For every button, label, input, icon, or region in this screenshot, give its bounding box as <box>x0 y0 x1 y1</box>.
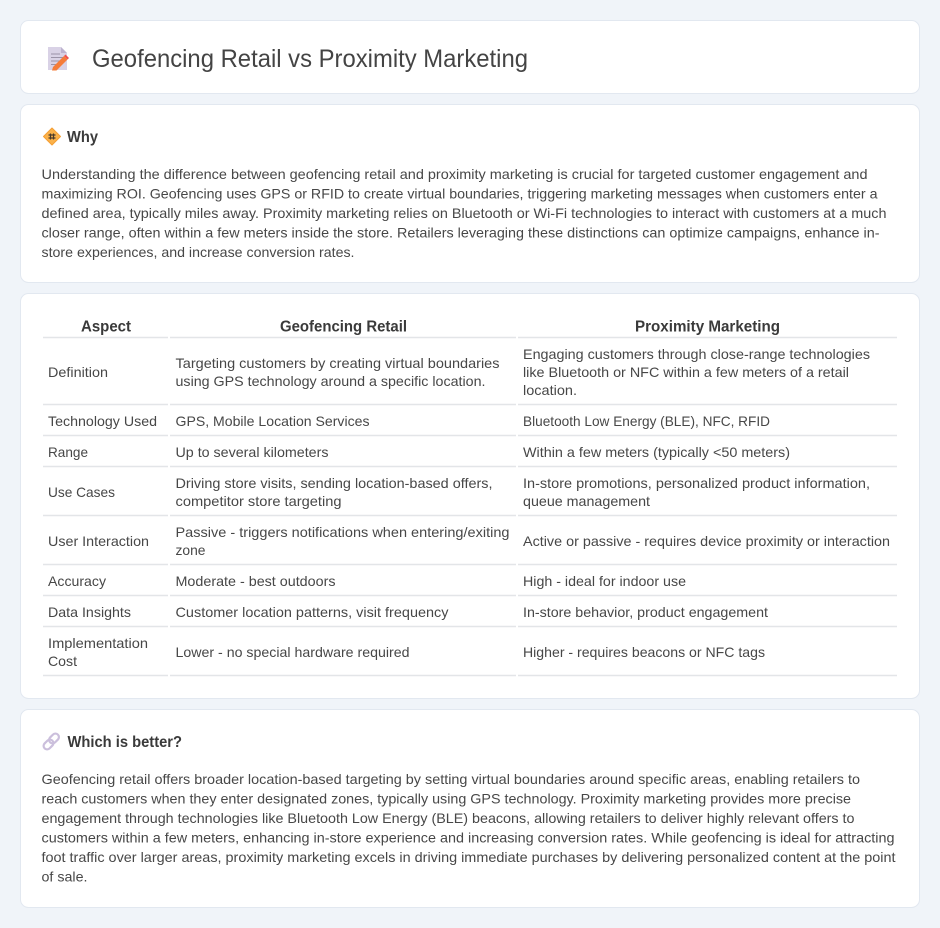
row: definition <box>48 346 870 398</box>
text block: why paragraph: defined area, typically miles away. Proximity marketing relies on Bluetooth or Wi-Fi technologies to interact with customers at a much <box>42 205 886 221</box>
table header row: Proximity Marketing <box>635 318 780 336</box>
panel: header <box>20 20 920 94</box>
row: use cases <box>48 475 870 509</box>
panel: comparison table <box>20 294 920 698</box>
row: use cases: Driving store visits, sending location-based offers, <box>176 475 492 491</box>
row: implementation cost <box>48 635 765 669</box>
table header row: Aspect <box>81 318 132 336</box>
table header row: Geofencing Retail <box>280 318 407 336</box>
icon: chain link <box>42 732 60 751</box>
panel: why <box>20 104 920 282</box>
row: data insights <box>48 604 768 620</box>
row: range: Range <box>48 444 88 460</box>
row: technology used: Technology Used <box>48 413 157 429</box>
row: range <box>48 444 790 460</box>
text block: why paragraph <box>42 166 886 260</box>
row: user interaction: zone <box>176 542 206 558</box>
row: technology used <box>48 413 770 429</box>
row: data insights: Data Insights <box>48 604 131 620</box>
heading: which is better: Which is better? <box>68 734 182 751</box>
text block: why paragraph: maximizing ROI. Geofencing uses GPS or RFID to create virtual boundaries, triggering marketing messages when customers enter a <box>42 186 878 202</box>
row: use cases: Use Cases <box>48 484 115 500</box>
text block: why paragraph: closer range, often within a few meters inside the store. Retailers leveraging these distinctions can optimize campaigns, enhance in- <box>42 224 880 240</box>
text block: which is better paragraph: reach customers when they enter designated zones, typically using GPS technology. Proximity marketing provides more precise <box>42 790 851 806</box>
row: definition: like Bluetooth or NFC within a few meters of a retail <box>523 364 849 380</box>
row: user interaction <box>48 524 890 558</box>
row: accuracy: Moderate - best outdoors <box>176 573 336 589</box>
row: implementation cost: Lower - no special hardware required <box>176 644 410 660</box>
row: data insights: Customer location patterns, visit frequency <box>176 604 448 620</box>
row: technology used: GPS, Mobile Location Services <box>176 413 370 429</box>
text block: which is better paragraph: foot traffic over larger areas, proximity marketing excels in driving immediate purchases by delivering personalized content at the point <box>42 849 896 865</box>
icon: memo with pencil <box>48 47 69 70</box>
icon: orange diamond sign <box>44 128 60 145</box>
row: definition: location. <box>523 382 577 398</box>
row: use cases: competitor store targeting <box>176 493 342 509</box>
text block: why paragraph: Understanding the difference between geofencing retail and proximity marketing is crucial for targeted customer engagement and <box>42 166 868 182</box>
row: range: Up to several kilometers <box>176 444 328 460</box>
text block: which is better paragraph <box>42 771 896 884</box>
row: implementation cost: Implementation <box>48 635 148 651</box>
text block: which is better paragraph: engagement through technologies like Bluetooth Low Energy (BLE) beacons, allowing retailers to deliver highly relevant offers to <box>42 810 855 826</box>
row: user interaction: Active or passive - requires device proximity or interaction <box>523 533 890 549</box>
row: use cases: In-store promotions, personalized product information, <box>523 475 870 491</box>
row: user interaction: User Interaction <box>48 533 149 549</box>
row: user interaction: Passive - triggers notifications when entering/exiting <box>176 524 510 540</box>
row: use cases: queue management <box>523 493 650 509</box>
row: definition: using GPS technology around a specific location. <box>176 373 486 389</box>
row: data insights: In-store behavior, product engagement <box>523 604 768 620</box>
table header row <box>81 318 780 336</box>
row: implementation cost: Cost <box>48 653 77 669</box>
title: Geofencing Retail vs Proximity Marketing <box>92 45 528 73</box>
panel: which is better <box>20 710 920 908</box>
row: definition: Definition <box>48 364 108 380</box>
text block: which is better paragraph: of sale. <box>42 868 88 884</box>
text block: which is better paragraph: Geofencing retail offers broader location-based targeting by setting virtual boundaries around specific areas, enabling retailers to <box>42 771 860 787</box>
text block: which is better paragraph: customers within a few meters, enhancing in-store experience and increasing conversion rates. While geofencing is ideal for attracting <box>42 830 895 846</box>
row: definition: Engaging customers through close-range technologies <box>523 346 870 362</box>
heading: why: Why <box>67 129 98 146</box>
row: implementation cost: Higher - requires beacons or NFC tags <box>523 644 765 660</box>
row: accuracy <box>48 573 686 589</box>
text block: why paragraph: store experiences, and increase conversion rates. <box>42 244 354 260</box>
row: accuracy: High - ideal for indoor use <box>523 573 686 589</box>
row: definition: Targeting customers by creating virtual boundaries <box>176 355 500 371</box>
row: accuracy: Accuracy <box>48 573 106 589</box>
row: technology used: Bluetooth Low Energy (BLE), NFC, RFID <box>523 413 770 429</box>
row: range: Within a few meters (typically <50 meters) <box>523 444 790 460</box>
